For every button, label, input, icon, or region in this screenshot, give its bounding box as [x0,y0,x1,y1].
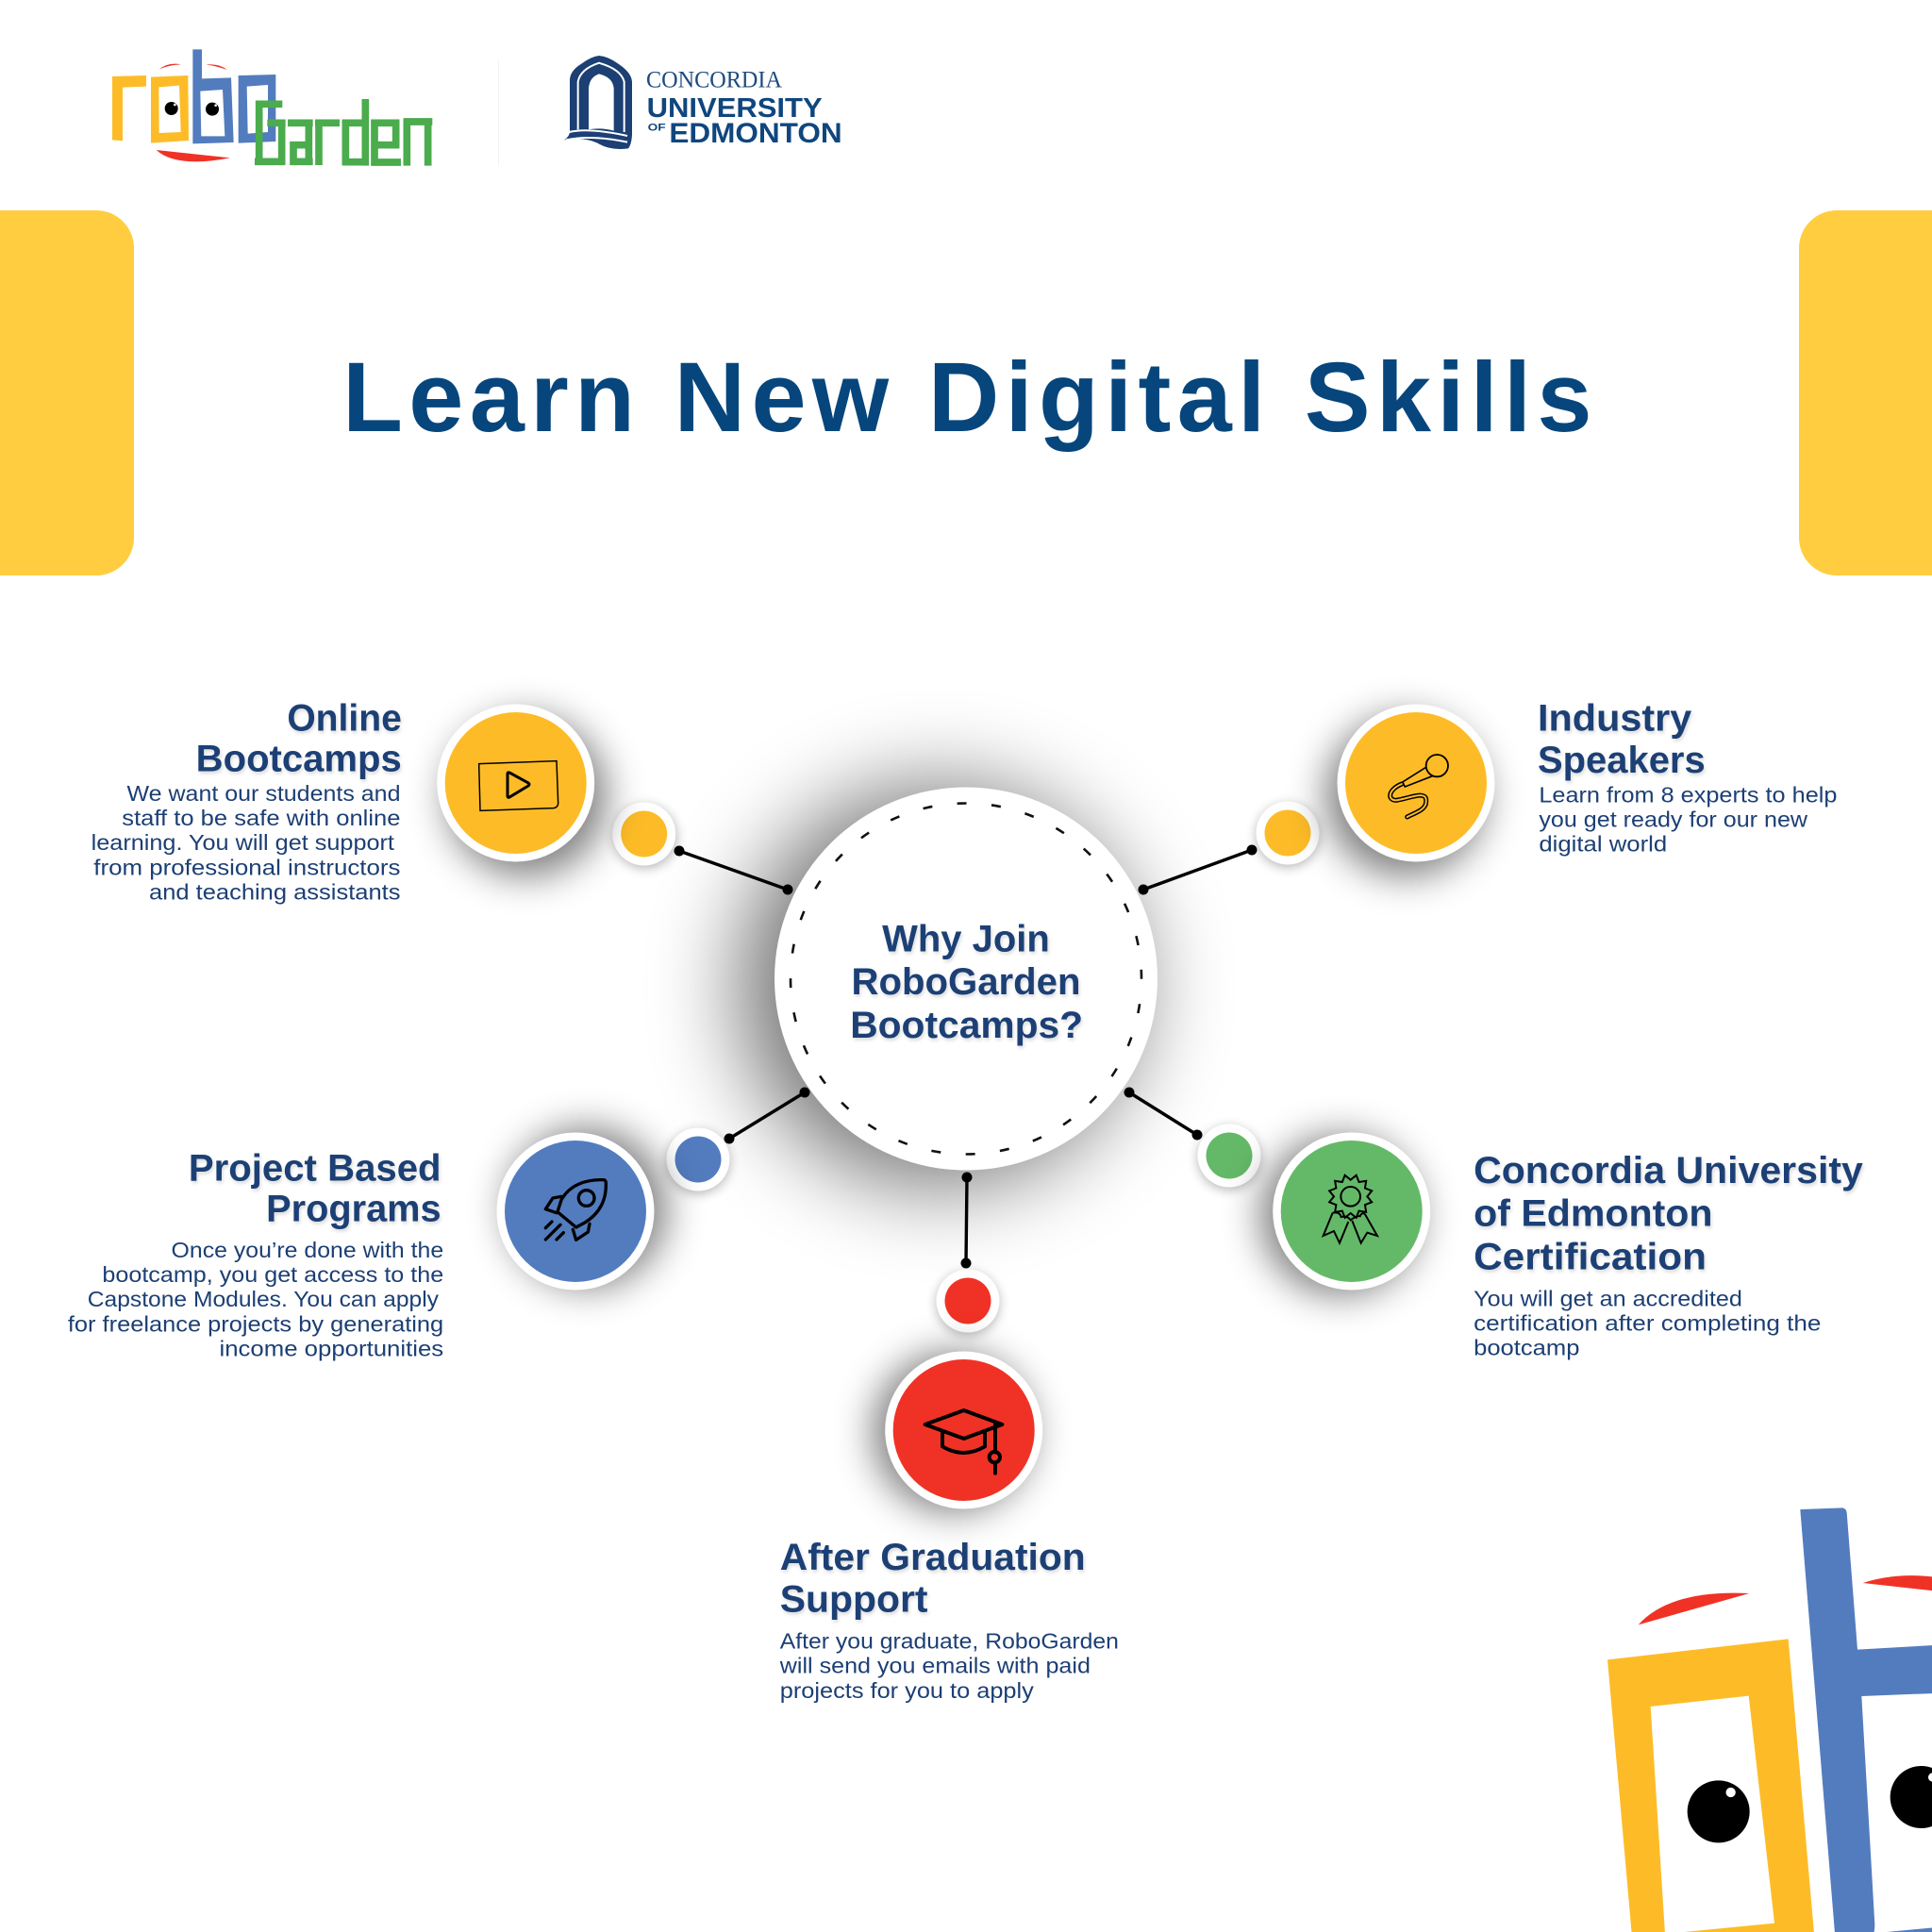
connector: industry speakers [1138,845,1257,894]
heading: online bootcamps: Bootcamps [196,739,402,780]
badge: industry speakers [1325,704,1494,876]
heading: project based [189,1147,441,1229]
description: project based: Capstone Modules. You can apply [88,1287,439,1311]
description: graduation support: will send you emails with paid [779,1654,1091,1678]
heading: certification [1474,1150,1863,1277]
heading: graduation support [780,1537,1086,1620]
description: project based [68,1238,443,1360]
heading: project based: Programs [266,1188,441,1229]
heading: industry speakers: Industry [1538,698,1691,740]
logo text: of: OF [648,122,666,133]
heading: online bootcamps: Online [287,698,402,740]
badge: certification [1260,1132,1430,1295]
node dot: blue [666,1128,730,1193]
badge: online bootcamps [437,704,607,876]
central hub [740,786,1158,1186]
badge: graduation [873,1351,1042,1512]
logo text: University: UNIVERSITY [647,93,823,124]
text block: certification [1474,1150,1863,1360]
logo: RoboGarden [112,49,432,166]
description: project based: Once you’re done with the [172,1238,443,1262]
connector: online bootcamps [674,845,792,894]
node dot: red [936,1270,1000,1335]
divider [498,59,499,166]
text block: industry speakers [1538,698,1837,857]
heading: graduation support: After Graduation [780,1537,1086,1578]
description: industry speakers: you get ready for our new [1539,807,1807,831]
text block: online bootcamps [92,698,402,904]
heading: certification: Concordia University [1474,1150,1863,1191]
icon: microphone [1391,755,1448,817]
description: industry speakers: digital world [1539,832,1667,857]
heading: project based: Project Based [189,1147,441,1189]
hub heading [850,918,1083,1046]
description: project based: bootcamp, you get access to the [102,1262,443,1287]
node dot: yellow left [612,802,676,868]
hub heading: Why Join [882,918,1050,959]
logo crest [564,56,632,149]
heading: industry speakers: Speakers [1538,740,1706,781]
description: certification: bootcamp [1474,1336,1579,1360]
description: project based: for freelance projects by generating [68,1311,443,1336]
description: online bootcamps: staff to be safe with online [122,806,400,830]
node dot: green [1198,1124,1260,1190]
heading: graduation support: Support [780,1578,928,1620]
logo text: Concordia: CONCORDIA [646,67,782,92]
hub heading: RoboGarden [852,961,1080,1003]
description: industry speakers [1539,782,1837,857]
mascot: corner robot [1607,1507,1932,1932]
icon: rocket [545,1180,606,1240]
description: online bootcamps [92,781,400,904]
description: graduation support: After you graduate, RoboGarden [780,1629,1119,1654]
heading: industry speakers [1538,698,1706,781]
connector: project based [724,1087,809,1143]
node dot: yellow right [1257,802,1319,867]
description: online bootcamps: from professional instructors [93,855,400,879]
description: certification: certification after completing the [1474,1311,1821,1336]
title: Learn New Digital Skills [342,342,1592,453]
description: graduation support [779,1629,1119,1703]
panel: right yellow tab [1799,210,1932,575]
connector: graduation [960,1172,972,1268]
heading: online bootcamps [196,698,402,780]
description: graduation support: projects for you to apply [780,1678,1034,1703]
icon: graduation cap [925,1410,1002,1474]
badge: project based [496,1127,667,1291]
description: certification: You will get an accredited [1474,1286,1742,1310]
description: online bootcamps: learning. You will get support [92,830,395,855]
text block: project based [68,1147,443,1360]
heading: certification: Certification [1474,1236,1707,1277]
text block: graduation support [779,1537,1119,1703]
logo text: Edmonton: EDMONTON [669,118,842,149]
panel: left yellow tab [0,210,134,575]
hub heading: Bootcamps? [850,1005,1083,1046]
heading: certification: of Edmonton [1474,1193,1713,1235]
connector: certification [1124,1087,1202,1140]
description: certification [1474,1286,1821,1360]
description: online bootcamps: and teaching assistants [149,879,400,904]
logo: Concordia University of Edmonton [564,56,842,149]
description: online bootcamps: We want our students and [127,781,400,806]
description: project based: income opportunities [219,1336,443,1360]
icon: video play [479,761,558,810]
description: industry speakers: Learn from 8 experts to help [1539,782,1837,807]
icon: award ribbon [1324,1175,1377,1243]
